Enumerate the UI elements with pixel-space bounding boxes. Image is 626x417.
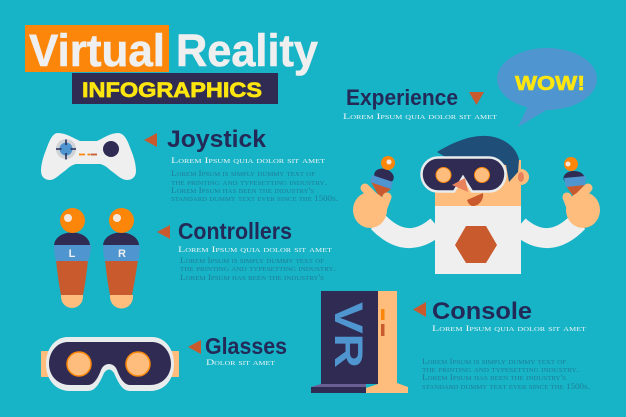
title xyxy=(25,25,318,104)
nose xyxy=(452,178,468,192)
title: Reality xyxy=(176,25,318,76)
arrow: experience xyxy=(469,92,484,105)
experience subtitle: Lorem Ipsum quia dolor sit amet xyxy=(343,111,497,121)
glasses heading: Glasses xyxy=(205,333,287,359)
title: Virtual xyxy=(29,25,165,76)
console text: the printing and typesetting industry. xyxy=(422,365,579,374)
joystick text: Lorem Ipsum has been the industry's xyxy=(171,186,314,195)
icon: controllers xyxy=(54,208,140,308)
hexagon xyxy=(455,226,497,263)
character xyxy=(353,136,600,274)
console text: standard dummy text ever since the 1500s. xyxy=(422,382,590,391)
icon: joystick xyxy=(41,133,136,180)
arrow: glasses xyxy=(188,340,201,354)
experience heading: Experience xyxy=(346,85,458,110)
controllers text: Lorem Ipsum has been the industry's xyxy=(180,273,324,282)
torso xyxy=(435,206,521,274)
right hand xyxy=(566,188,600,228)
console text xyxy=(422,357,590,391)
arrow: joystick xyxy=(144,133,157,147)
console heading: Console xyxy=(432,298,532,325)
ear xyxy=(513,169,529,185)
speech bubble: WOW! xyxy=(515,72,585,95)
joystick heading: Joystick xyxy=(167,126,267,153)
joystick text: Lorem Ipsum is simply dummy text of xyxy=(171,169,316,178)
title: INFOGRAPHICS xyxy=(82,78,262,102)
console text: Lorem Ipsum is simply dummy text of xyxy=(422,357,567,366)
console text: Lorem Ipsum has been the industry's xyxy=(422,373,566,382)
icon: console: VR xyxy=(326,302,370,368)
joystick text xyxy=(171,169,338,203)
vr goggles xyxy=(422,158,506,192)
icon: console xyxy=(311,291,408,393)
glasses subtitle: Dolor sit amet xyxy=(206,357,275,367)
console subtitle: Lorem Ipsum quia dolor sit amet xyxy=(432,323,586,333)
icon: glasses xyxy=(41,337,179,391)
right controller: R xyxy=(118,248,126,260)
mouth xyxy=(467,193,483,206)
face xyxy=(435,160,521,207)
left controller: L xyxy=(69,248,76,260)
joystick text: standard dummy text ever since the 1500s. xyxy=(171,194,338,203)
left hand xyxy=(353,188,387,228)
hair xyxy=(437,136,519,182)
controllers text: the printing and typesetting industry. xyxy=(180,264,336,273)
arms xyxy=(378,222,578,238)
controllers heading: Controllers xyxy=(178,218,292,244)
arrow: controllers xyxy=(157,225,170,239)
controllers text: Lorem Ipsum is simply dummy text of xyxy=(180,256,325,265)
controllers text xyxy=(180,256,336,282)
joystick subtitle: Lorem Ipsum quia dolor sit amet xyxy=(171,155,325,165)
arrow: console xyxy=(413,302,426,317)
left hand controller xyxy=(370,156,396,198)
controllers subtitle: Lorem Ipsum quia dolor sit amet xyxy=(178,244,332,254)
joystick text: the printing and typesetting industry. xyxy=(171,178,327,187)
right hand controller xyxy=(564,157,586,197)
speech bubble xyxy=(497,48,597,127)
